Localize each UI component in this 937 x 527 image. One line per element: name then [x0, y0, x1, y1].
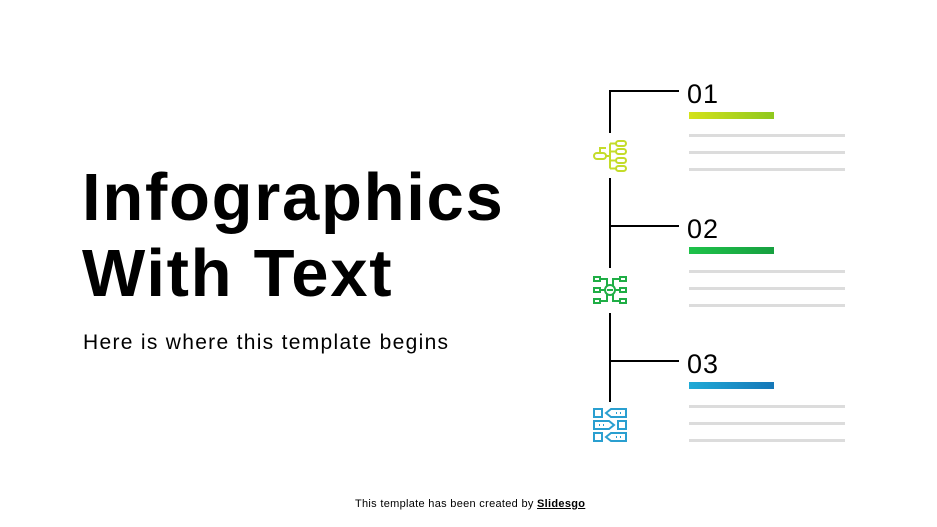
number 01: 01	[687, 79, 719, 109]
icon: network	[593, 276, 627, 304]
item 3	[593, 349, 845, 442]
title: Infographics	[82, 160, 504, 235]
icon: blocks	[593, 408, 627, 442]
bar 01	[689, 112, 774, 119]
item 2	[593, 214, 845, 307]
number 02: 02	[687, 214, 719, 244]
subtitle: Here is where this template begins	[83, 331, 449, 354]
bar 03	[689, 382, 774, 389]
title: With Text	[82, 236, 393, 311]
text lines 01	[689, 134, 845, 171]
text lines 02	[689, 270, 845, 307]
title	[82, 160, 504, 311]
footer credit: This template has been created by Slidesgo	[355, 498, 585, 510]
icon: hierarchy	[593, 140, 627, 172]
bar 02	[689, 247, 774, 254]
number 03: 03	[687, 349, 719, 379]
item 1	[593, 79, 845, 172]
text lines 03	[689, 405, 845, 442]
